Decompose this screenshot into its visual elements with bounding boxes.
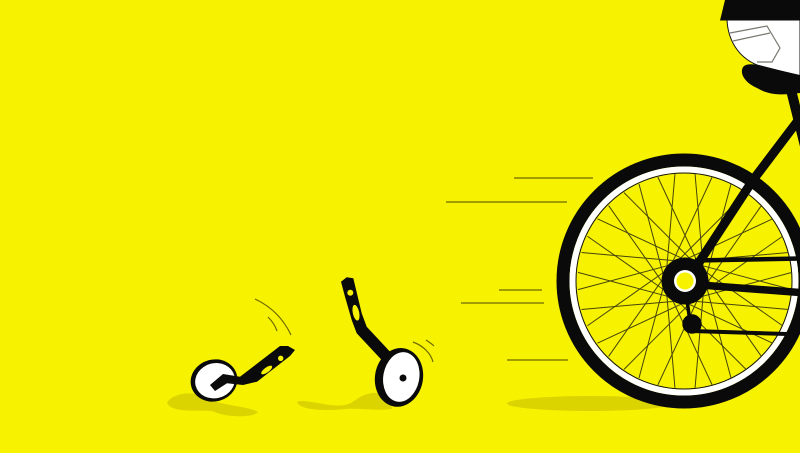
wheel shadow [167,393,258,416]
derailleur [682,314,702,334]
wheel [370,344,428,411]
rider: black shirt hem [720,0,800,20]
spokes [578,174,792,388]
motion arcs [255,299,291,335]
motion arcs [413,340,434,362]
bicycle frame [687,90,800,334]
arm slots [260,364,273,376]
right fallen training wheel [297,277,434,411]
rear bicycle wheel [563,160,800,402]
bicycle ground shadow [507,396,673,411]
bicycle saddle [742,64,800,94]
speed lines [446,178,593,360]
arm slots [347,290,353,296]
left fallen training wheel [167,299,295,416]
wheel shadow [297,393,392,410]
tyre [563,160,800,402]
rider: white trousers with pocket [727,20,800,76]
rear hub and sprocket [662,258,708,304]
inner rim line [576,173,792,389]
white rim [572,170,796,392]
wheel [186,354,242,407]
mounting arm [341,277,390,360]
mounting arm [210,346,295,391]
